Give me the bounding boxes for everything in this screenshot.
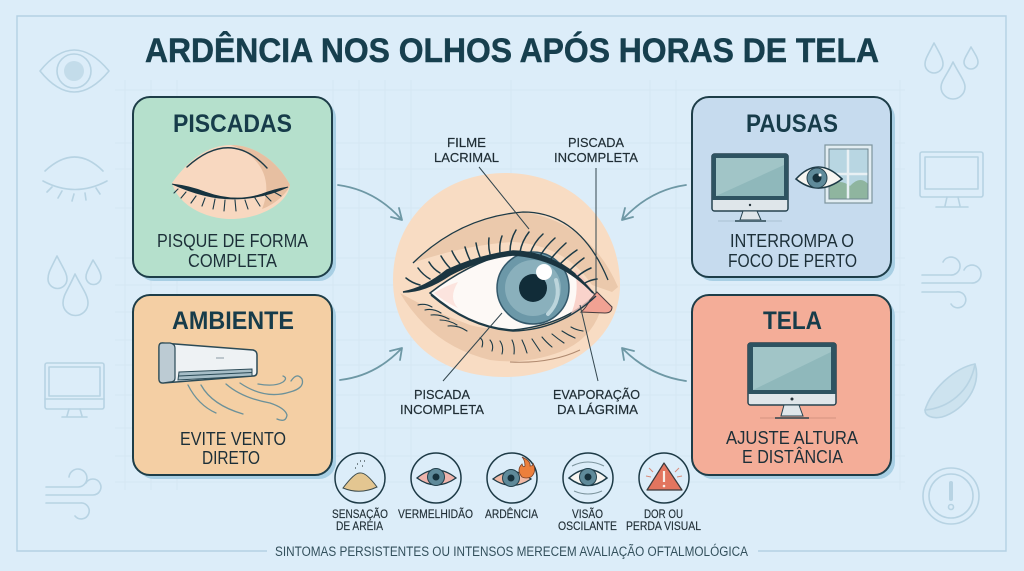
text: ambiente: DIRETO — [202, 448, 260, 468]
icon: faint monitor — [45, 363, 104, 417]
lower lashes — [418, 304, 583, 354]
background icons right — [920, 43, 983, 524]
icon: window — [825, 145, 872, 203]
icon: faint drops right — [925, 43, 978, 99]
icon: faint eye — [40, 50, 109, 92]
label: piscada incompleta bottom: PISCADA — [414, 387, 470, 402]
symptom: visao oscilante — [558, 453, 617, 533]
tear caruncle — [581, 292, 612, 313]
label: piscada incompleta top — [554, 135, 638, 165]
symptom: ardencia: ARDÊNCIA — [485, 508, 538, 521]
panel: pausas — [692, 97, 895, 281]
icon: monitor — [712, 154, 788, 221]
symptom: vermelhidao: VERMELHIDÃO — [398, 508, 473, 521]
symptom: visao oscilante: OSCILANTE — [558, 521, 617, 533]
label: piscada incompleta bottom — [400, 387, 484, 417]
text: pausas: INTERROMPA O — [730, 231, 854, 251]
text: piscadas — [157, 231, 308, 271]
icon: faint drops — [48, 256, 101, 316]
symptom: dor ou perda visual: PERDA VISUAL — [626, 521, 702, 533]
callout leaders — [443, 167, 598, 381]
icon: eye — [796, 167, 842, 188]
text: tela: AJUSTE ALTURA — [726, 428, 858, 448]
label: filme lacrimal: FILME — [447, 135, 486, 150]
arrow: piscadas to eye — [338, 185, 402, 220]
symptom: sensacao de areia: SENSAÇÃO — [332, 508, 388, 521]
text: piscadas: COMPLETA — [188, 251, 277, 271]
icon: faint wind right — [922, 257, 981, 308]
panel: ambiente — [133, 295, 336, 479]
text: piscadas: PISQUE DE FORMA — [157, 231, 308, 251]
symptom: vermelhidao — [398, 453, 473, 521]
symptom: sensacao de areia — [332, 453, 388, 533]
skin halo — [393, 173, 620, 377]
panel: piscadas — [133, 97, 336, 281]
arrow: pausas to eye — [622, 185, 686, 220]
icon: faint closed eye — [43, 157, 107, 201]
label: piscada incompleta bottom: INCOMPLETA — [400, 402, 484, 417]
label: filme lacrimal — [434, 135, 499, 165]
heading: tela: TELA — [763, 307, 822, 335]
icon: monitor large — [748, 343, 836, 418]
upper lash line — [403, 251, 593, 293]
symptom: ardencia — [485, 453, 538, 521]
icon: closed eye — [172, 145, 290, 219]
heading: piscadas: PISCADAS — [173, 110, 292, 138]
central eye diagram — [393, 135, 640, 417]
eyelid shading — [400, 212, 618, 362]
text: ambiente: EVITE VENTO — [180, 429, 286, 449]
iris — [497, 252, 569, 324]
heading: pausas: PAUSAS — [746, 110, 838, 138]
eye white — [430, 252, 595, 330]
background icons left — [40, 50, 109, 519]
label: filme lacrimal: LACRIMAL — [434, 150, 499, 165]
arrow: ambiente to eye — [340, 348, 402, 380]
text: pausas — [728, 231, 857, 271]
upper lashes — [406, 230, 597, 285]
label: piscada incompleta top: INCOMPLETA — [554, 150, 638, 165]
text: tela: E DISTÂNCIA — [742, 447, 843, 467]
title: ARDÊNCIA NOS OLHOS APÓS HORAS DE TELA — [145, 32, 879, 70]
icon: faint alert — [923, 468, 979, 524]
symptom: dor ou perda visual: DOR OU — [644, 509, 683, 521]
lower lid line — [431, 295, 596, 331]
text: ambiente — [180, 429, 286, 468]
icon: faint monitor right — [920, 152, 983, 207]
text: tela — [726, 428, 858, 467]
footer note: SINTOMAS PERSISTENTES OU INTENSOS MERECEM AVALIAÇÃO OFTALMOLÓGICA — [275, 544, 748, 559]
symptom: sensacao de areia: DE AREIA — [336, 521, 383, 533]
label: evaporacao da lagrima: EVAPORAÇÃO — [553, 387, 640, 402]
text: pausas: FOCO DE PERTO — [728, 251, 857, 271]
symptom: visao oscilante: VISÃO — [572, 508, 603, 521]
icon: faint contact lens — [925, 364, 977, 418]
heading: ambiente: AMBIENTE — [172, 307, 294, 335]
upper lid crease — [413, 212, 608, 280]
symptom: dor ou perda visual — [626, 453, 702, 533]
icon: air conditioner — [159, 343, 302, 420]
panel: tela — [692, 295, 895, 479]
label: evaporacao da lagrima — [553, 387, 640, 417]
icon: faint wind — [46, 469, 101, 519]
label: piscada incompleta top: PISCADA — [568, 135, 624, 150]
arrow: tela to eye — [622, 348, 686, 381]
label: evaporacao da lagrima: DA LÁGRIMA — [557, 402, 638, 417]
